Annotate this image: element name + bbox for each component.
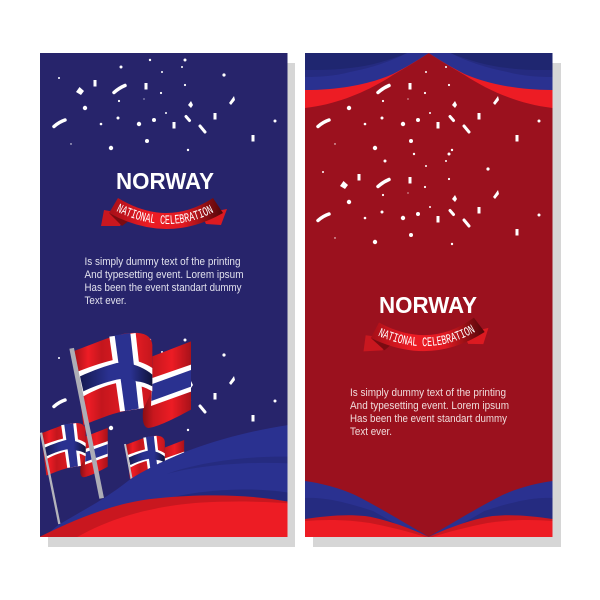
panel: blue banner xyxy=(40,53,288,540)
flag pole: left small xyxy=(41,433,59,524)
heading: NORWAY left: NORWAY xyxy=(116,168,214,194)
ribbon: right xyxy=(364,318,488,352)
body text: left: And typesetting event. Lorem ipsum xyxy=(84,269,244,281)
wave right xyxy=(428,481,552,537)
ribbon text: NATIONAL CELEBRATION xyxy=(116,204,214,224)
wave hills xyxy=(40,425,288,540)
body text: right: And typesetting event. Lorem ipsum xyxy=(350,400,509,412)
flag: large xyxy=(74,333,191,428)
body text: right: Is simply dummy text of the printing xyxy=(350,387,506,399)
dark red hill xyxy=(40,495,288,540)
blue hill xyxy=(50,425,288,532)
panel background xyxy=(305,53,552,537)
body text: left xyxy=(84,256,244,307)
flags group xyxy=(41,333,191,524)
panel shadow: right xyxy=(313,63,561,547)
confetti behind flags xyxy=(54,338,276,431)
panel background xyxy=(40,53,288,537)
confetti xyxy=(318,58,540,151)
flag pole: large xyxy=(72,348,102,498)
body text: left: Has been the event standart dummy xyxy=(84,282,242,294)
confetti lower xyxy=(318,152,540,245)
curtain: top xyxy=(305,53,552,108)
body text: right: Text ever. xyxy=(350,426,392,438)
bright red hill xyxy=(77,502,288,540)
dark blue fold lower xyxy=(177,490,288,502)
body text: left: Is simply dummy text of the printing xyxy=(84,256,240,268)
waves: bottom xyxy=(305,481,552,537)
confetti top xyxy=(54,58,276,151)
curtain right xyxy=(428,53,552,108)
flag: left small xyxy=(41,423,108,477)
panel shadow: left xyxy=(48,63,295,547)
ribbon: left xyxy=(101,198,227,229)
panel: red banner xyxy=(305,53,552,537)
dark blue fold upper xyxy=(167,457,288,474)
wave left xyxy=(305,481,429,537)
flag: middle small xyxy=(126,436,184,483)
flag pole: middle small xyxy=(125,444,132,479)
curtain left xyxy=(305,53,429,108)
body text: right: Has been the event standart dummy xyxy=(350,413,507,425)
body text: right xyxy=(350,387,509,438)
heading: NORWAY right: NORWAY xyxy=(379,292,477,318)
body text: left: Text ever. xyxy=(84,295,126,307)
ribbon text: NATIONAL CELEBRATION xyxy=(378,324,475,346)
